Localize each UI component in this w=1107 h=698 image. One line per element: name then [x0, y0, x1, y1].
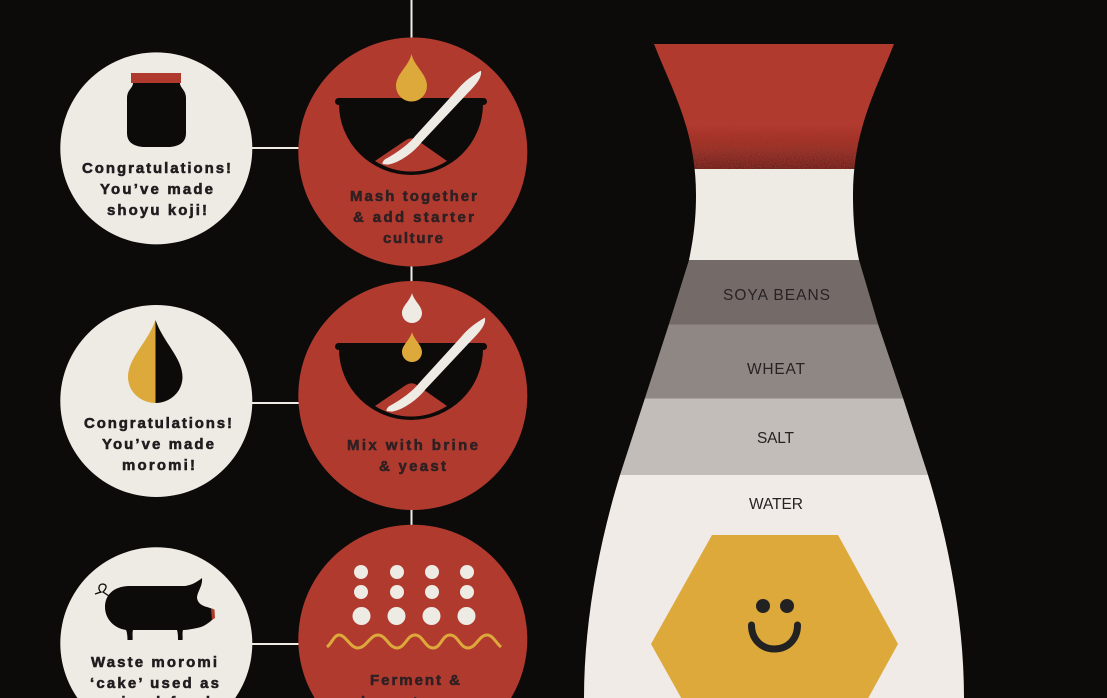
label: wheat: WHEAT: [747, 361, 806, 378]
text: mash: Mash together: [350, 188, 477, 205]
icon: split drop: [128, 320, 182, 403]
panel: moromi result: [60, 305, 252, 497]
panel: mix step: [298, 281, 527, 510]
text: shoyu koji: You’ve made: [100, 181, 213, 198]
icon: smiling hexagon: [651, 535, 898, 698]
text: mash: culture: [383, 230, 443, 247]
text: moromi: Congratulations!: [84, 415, 232, 432]
band: soya beans: [668, 260, 878, 324]
text: waste moromi: [90, 654, 219, 698]
text: mix: & yeast: [379, 458, 446, 475]
panel: soy sauce bottle: [570, 44, 980, 698]
label: salt: SALT: [757, 430, 795, 447]
text: moromi: [84, 415, 232, 474]
icon: pig: [95, 578, 215, 640]
panel: waste moromi: [60, 547, 252, 698]
text: waste moromi: Waste moromi: [91, 654, 217, 671]
icon: jar: [127, 73, 186, 147]
band: water: [570, 475, 980, 698]
band: salt: [610, 398, 940, 475]
label: water: WATER: [749, 496, 803, 513]
text: ferment: [362, 674, 460, 698]
text: mash: & add starter: [353, 209, 474, 226]
icon: wave: [327, 635, 501, 648]
bottle neck: cream: [689, 169, 859, 260]
connector lines: [252, 0, 412, 698]
text: shoyu koji: shoyu koji!: [107, 202, 207, 219]
text: shoyu koji: Congratulations!: [82, 160, 231, 177]
text: mash: [350, 188, 477, 247]
text: ferment: Ferment &: [370, 672, 460, 689]
icon: dots: [352, 565, 476, 625]
text: moromi: moromi!: [122, 457, 195, 474]
panel: mash step: [298, 38, 527, 266]
band: wheat: [644, 324, 904, 398]
panel: shoyu koji result: [60, 52, 252, 244]
panel: ferment step: [298, 525, 527, 698]
text: mix: [347, 437, 478, 475]
text: moromi: You’ve made: [102, 436, 214, 453]
icon: bowl with spoon: [335, 54, 487, 175]
bottle top: red sauce: [654, 44, 894, 169]
label: soya beans: SOYA BEANS: [723, 287, 830, 304]
text: mix: Mix with brine: [347, 437, 478, 454]
text: waste moromi: ‘cake’ used as: [90, 675, 219, 692]
text: shoyu koji: [82, 160, 231, 219]
icon: bowl with spoon and drops: [335, 293, 487, 420]
